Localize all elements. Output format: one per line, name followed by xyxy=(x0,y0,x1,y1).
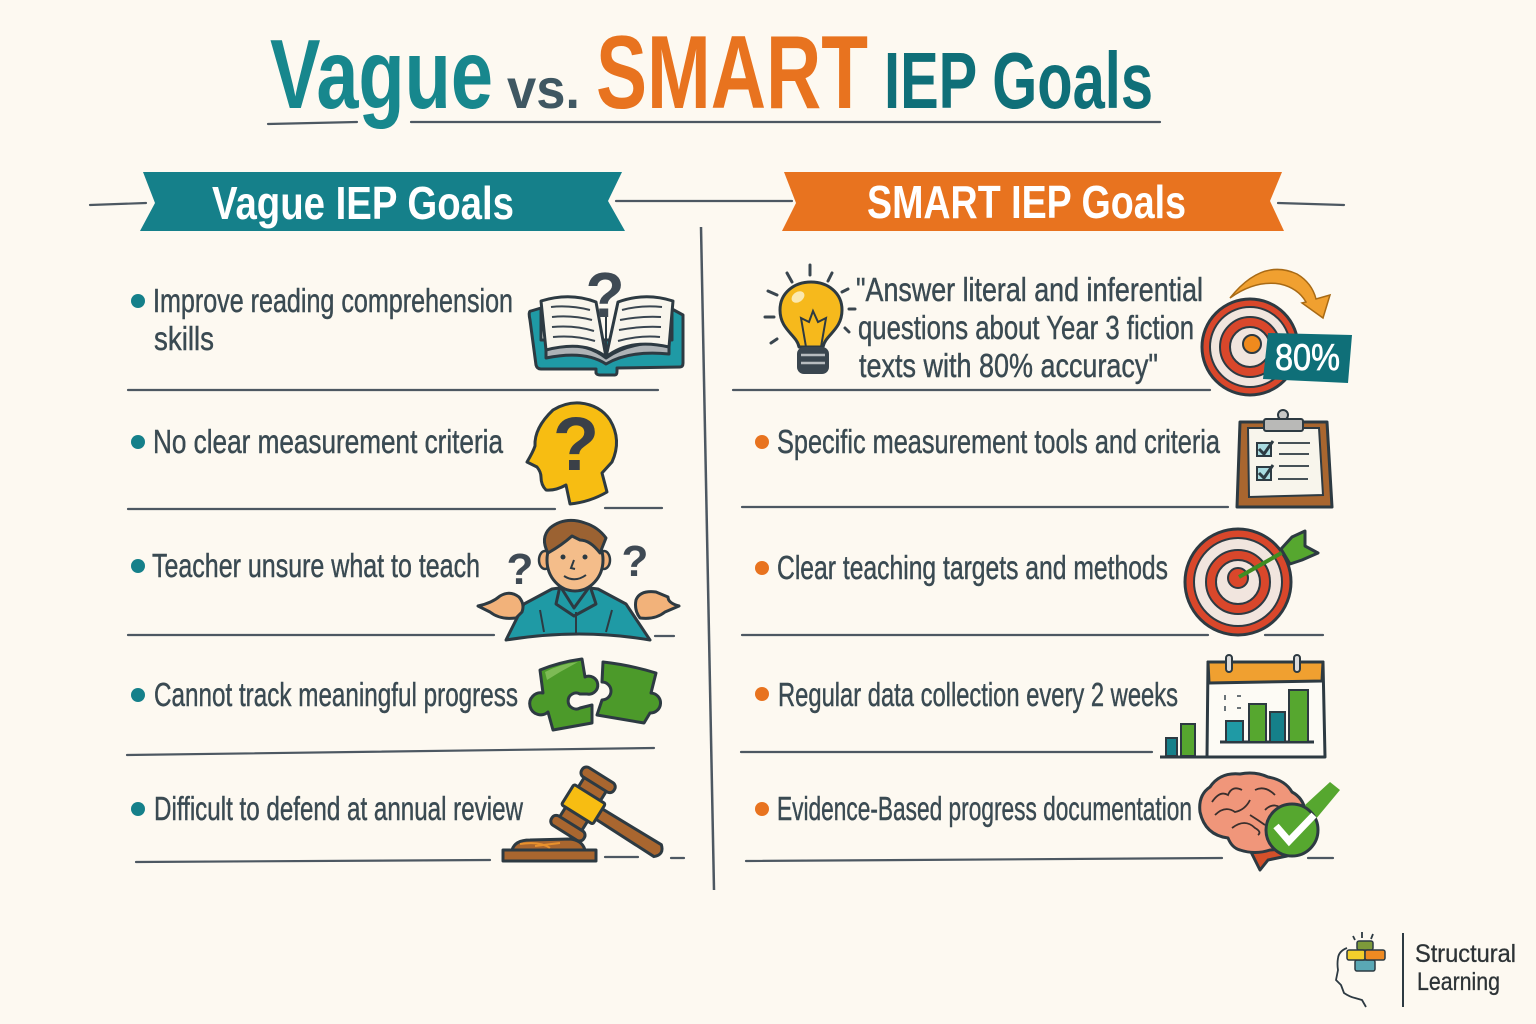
icon: clipboard checklist xyxy=(1237,410,1332,507)
item: clear teaching targets: Clear teaching targets and methods xyxy=(777,549,1168,586)
item: SMART goal example quote: texts with 80% accuracy" xyxy=(859,347,1158,384)
icon: open book with question mark: ? xyxy=(585,259,625,331)
icon: target with green arrow xyxy=(1185,529,1318,635)
banner: SMART heading: SMART IEP Goals xyxy=(867,176,1186,228)
icon: target with 80 percent flag: 80% xyxy=(1275,337,1340,378)
icon: calendar with bar chart xyxy=(1160,655,1325,757)
item: difficult to defend: Difficult to defend at annual review xyxy=(154,790,523,827)
logo: Structural Learning xyxy=(1336,932,1516,1007)
title xyxy=(270,15,1153,131)
item: cannot track progress: Cannot track meaningful progress xyxy=(154,676,518,713)
divider between columns xyxy=(701,227,714,890)
icon: confused teacher: ? xyxy=(507,545,533,594)
item: improve reading: Improve reading comprehension xyxy=(153,282,513,319)
icon: target with 80 percent flag xyxy=(1202,269,1352,395)
logo: Structural Learning: Structural xyxy=(1415,940,1516,968)
item: evidence-based documentation: Evidence-Based progress documentation xyxy=(777,790,1192,827)
icon: head with question mark xyxy=(527,402,617,504)
icon: light bulb xyxy=(765,265,855,374)
item: SMART goal example quote xyxy=(856,271,1203,384)
banner: SMART heading xyxy=(782,172,1284,231)
title: Vague xyxy=(270,19,493,129)
banner: vague heading: Vague IEP Goals xyxy=(212,177,514,229)
panel: SMART IEP goals xyxy=(733,172,1352,870)
icon: puzzle pieces xyxy=(530,659,661,730)
icon: open book with question mark xyxy=(529,259,683,375)
item: improve reading: skills xyxy=(154,320,214,357)
item: improve reading xyxy=(131,282,513,357)
item: specific measurement: Specific measurement tools and criteria xyxy=(777,423,1220,460)
item: SMART goal example quote: questions about Year 3 fiction xyxy=(858,309,1194,346)
item: regular data collection: Regular data collection every 2 weeks xyxy=(778,676,1178,713)
logo: Structural Learning: Learning xyxy=(1417,968,1500,996)
icon: head with question mark: ? xyxy=(553,402,599,487)
icon: gavel xyxy=(503,765,679,882)
icon: brain with check mark xyxy=(1200,773,1340,870)
item: no clear measurement: No clear measurement criteria xyxy=(153,423,504,460)
banner: vague heading xyxy=(140,172,625,231)
title: vs. xyxy=(507,57,580,120)
item: teacher unsure: Teacher unsure what to teach xyxy=(152,547,480,584)
item: regular data collection xyxy=(755,676,1178,713)
title: SMART xyxy=(596,15,868,131)
title: IEP Goals xyxy=(884,36,1153,125)
icon: confused teacher: ? xyxy=(622,537,648,586)
item: evidence-based documentation xyxy=(755,790,1192,827)
item: SMART goal example quote: "Answer literal and inferential xyxy=(856,271,1203,308)
panel: vague IEP goals xyxy=(90,172,792,882)
icon: confused teacher xyxy=(478,520,679,640)
